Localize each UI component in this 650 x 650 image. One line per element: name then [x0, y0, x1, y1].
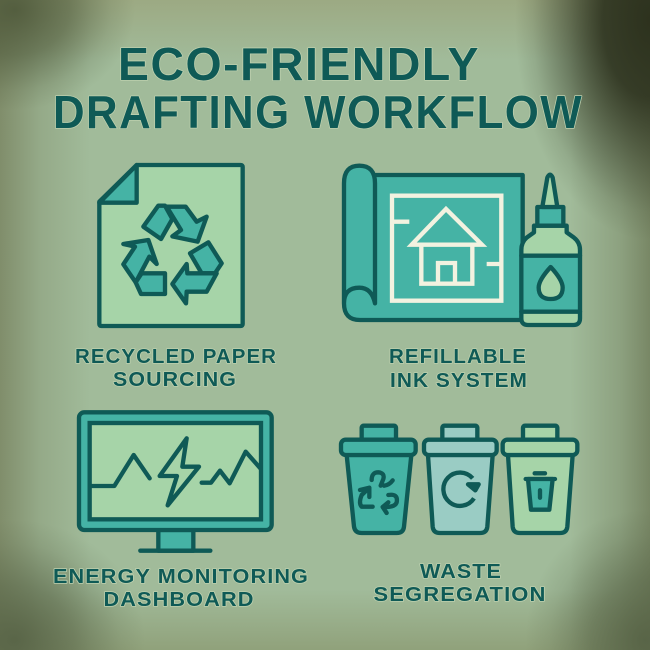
- label: waste segregation: [374, 561, 546, 606]
- bin: teal recycling: [341, 426, 416, 533]
- label: energy monitoring dashboard: [53, 566, 309, 611]
- blueprint sheet: [344, 166, 523, 320]
- icon: waste bins: [341, 426, 577, 533]
- title: DRAFTING WORKFLOW: [53, 86, 583, 138]
- label: waste segregation: WASTE: [420, 561, 502, 583]
- label: recycled paper sourcing: [75, 346, 277, 391]
- label: refillable ink system: INK SYSTEM: [390, 370, 528, 392]
- title: ECO-FRIENDLY: [118, 38, 480, 90]
- ink bottle: [521, 175, 580, 325]
- label: energy monitoring dashboard: ENERGY MONITORING: [53, 566, 309, 588]
- bin: green trash: [503, 426, 577, 533]
- label: energy monitoring dashboard: DASHBOARD: [104, 589, 254, 611]
- label: recycled paper sourcing: SOURCING: [113, 369, 237, 391]
- label: recycled paper sourcing: RECYCLED PAPER: [75, 346, 277, 368]
- icon: energy monitor: [79, 412, 272, 551]
- recycling arrows: [123, 206, 222, 303]
- bin: blue refresh: [424, 426, 497, 533]
- label: refillable ink system: REFILLABLE: [389, 346, 527, 368]
- title: [53, 38, 583, 138]
- icon: blueprint and ink bottle: [344, 166, 580, 325]
- label: waste segregation: SEGREGATION: [374, 584, 546, 606]
- icon: recycled paper: [99, 165, 243, 326]
- label: refillable ink system: [389, 346, 528, 392]
